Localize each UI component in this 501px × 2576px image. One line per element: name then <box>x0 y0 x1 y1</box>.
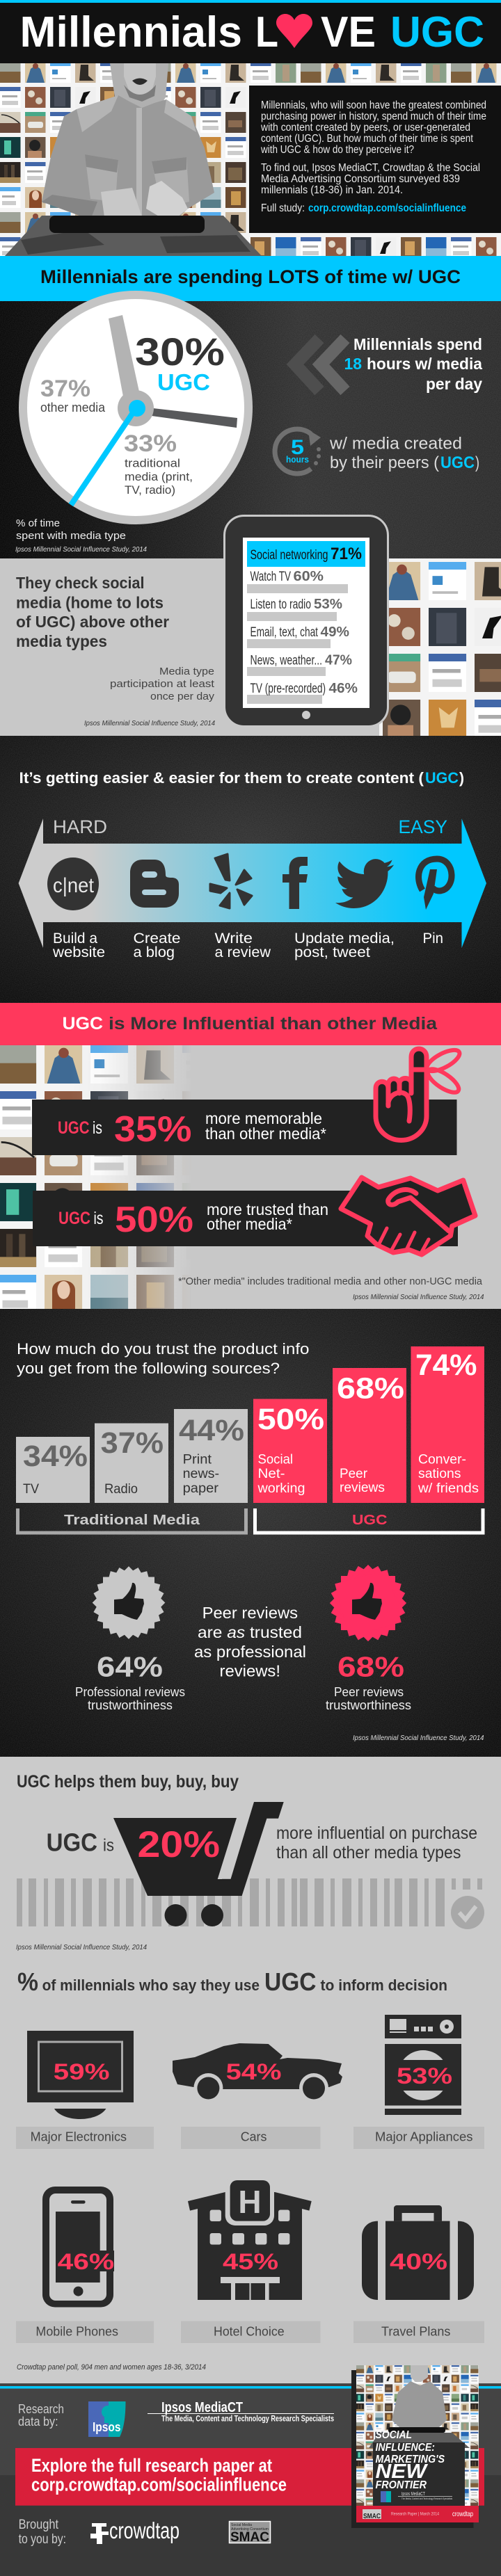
logo: crowdtap: crowdtap <box>109 2518 180 2543</box>
more influential text: more influential on purchase <box>276 1824 477 1843</box>
cover logos: Ipsos MediaCT <box>401 2492 426 2497</box>
heading: percent using UGC: of millennials who say they use <box>42 1977 260 1994</box>
source note: Ipsos Millennial Social Influence Study, 2014 <box>353 1294 484 1301</box>
heading band: more influential: is More Influential than other Media <box>109 1014 438 1033</box>
cover title: FRONTIER <box>376 2479 427 2491</box>
activity labels: Build a <box>53 931 97 947</box>
strip: 50 percent more trusted: is <box>93 1209 103 1228</box>
item: hotel choice: Hotel Choice <box>214 2325 285 2339</box>
icon: heart <box>276 14 312 48</box>
panel: trust dark background <box>0 1309 501 1757</box>
logo: SMAC <box>230 2522 270 2545</box>
brought to you by label: Brought <box>19 2518 59 2532</box>
social media heading: media types <box>16 632 107 650</box>
bracket: UGC <box>255 1508 483 1533</box>
cover logos <box>381 2491 452 2502</box>
bar: peer reviews: reviews <box>340 1481 385 1495</box>
UGC is 20 percent: 20% <box>138 1824 220 1865</box>
37 percent other media label: other media <box>40 401 106 414</box>
UGC is 20 percent: is <box>103 1836 114 1855</box>
badge: peer reviews: trustworthiness <box>326 1698 411 1712</box>
banner: explore the research paper: Explore the full research paper at <box>31 2455 272 2476</box>
intro paragraph <box>260 99 486 156</box>
bar: peer reviews: Peer <box>340 1467 368 1481</box>
chart caption <box>15 517 147 554</box>
icon: cnet <box>47 858 99 910</box>
18 hours text <box>344 335 482 393</box>
row: news: News, weather... <box>250 654 322 668</box>
hub centre <box>129 400 145 417</box>
heading band: more influential <box>0 1003 501 1045</box>
bar: conversations with friends: Conver- <box>418 1452 466 1467</box>
bar: social networking: Social <box>257 1452 293 1467</box>
row: social networking <box>247 541 365 567</box>
badge: peer reviews: 68% <box>337 1651 404 1683</box>
callout: as trusted: reviews! <box>220 1662 280 1680</box>
37 percent other media label: 37% <box>40 376 90 402</box>
badge: professional reviews: trustworthiness <box>88 1698 173 1712</box>
collage behind tablet <box>379 558 501 736</box>
logo: Ipsos MediaCT <box>148 2400 334 2424</box>
chart caption: % of time <box>16 517 60 529</box>
peers text: UGC <box>440 453 475 472</box>
research data by label: data by: <box>18 2415 58 2429</box>
row: social networking: 71% <box>331 545 362 563</box>
badge: professional reviews: 64% <box>97 1651 163 1683</box>
icon: double chevrons <box>295 339 345 391</box>
37 percent other media label <box>40 376 106 414</box>
arrow: hard to easy <box>19 816 486 948</box>
row: pre-recorded TV: 46% <box>328 681 358 696</box>
logo: Ipsos: Ipsos <box>93 2420 121 2434</box>
icon: 5 hours clock <box>275 429 321 474</box>
callout: as trusted <box>194 1604 306 1680</box>
panel: check social media grey background <box>0 558 501 736</box>
top cyan stripe <box>0 0 501 3</box>
icon: television <box>27 2031 134 2119</box>
peers text: w/ media created <box>329 434 462 453</box>
item: cars: Cars <box>241 2130 267 2143</box>
cover photo man <box>369 2365 470 2448</box>
bar: print newspaper: paper <box>183 1481 219 1496</box>
social media heading: of UGC) above other <box>16 613 169 631</box>
heading: getting easier: It’s getting easier & easier for them to create content ( <box>19 769 424 787</box>
bar: TV <box>16 1437 90 1503</box>
bar: social networking: working <box>257 1481 305 1496</box>
UGC is 20 percent <box>47 1824 220 1865</box>
bar: radio: Radio <box>104 1482 138 1497</box>
barcode <box>17 1878 482 1926</box>
source note: Ipsos Millennial Social Influence Study, 2014 <box>84 720 215 727</box>
row: radio: 53% <box>314 597 342 612</box>
chart: clock-style time split <box>23 295 248 520</box>
title text: L <box>255 8 278 56</box>
30 percent UGC label: UGC <box>157 369 210 395</box>
item: major electronics: Major Electronics <box>31 2130 127 2143</box>
icon: twitter <box>335 859 394 908</box>
activity labels: post, tweet <box>294 944 370 960</box>
item: mobile phones <box>16 2187 154 2343</box>
hand: traditional boundary dark <box>152 408 237 428</box>
activity labels: Pin <box>423 931 443 947</box>
icon: grey starburst thumbs up <box>93 1566 165 1639</box>
peers text: ) <box>475 453 479 472</box>
source note: Ipsos Millennial Social Influence Study, 2014 <box>16 1944 147 1951</box>
activity labels: website <box>52 944 105 960</box>
bracket: traditional media: Traditional Media <box>64 1513 200 1528</box>
33 percent traditional label: TV, radio) <box>125 483 175 497</box>
badge: peer reviews <box>326 1565 411 1712</box>
activity labels: Create <box>134 931 181 947</box>
heading: percent using UGC: % <box>17 1967 38 1996</box>
cover title: INFLUENCE: <box>376 2442 435 2454</box>
item: hotel choice: 45% <box>223 2249 278 2274</box>
strip: 35 percent more memorable: is <box>93 1118 102 1138</box>
item: travel plans: 40% <box>390 2249 447 2274</box>
activity labels: a blog <box>134 944 175 960</box>
bar: conversations with friends: sations <box>418 1467 461 1481</box>
panel: influence with faded collage <box>0 1045 501 1309</box>
bar: conversations with friends <box>411 1346 484 1503</box>
source note: Ipsos Millennial Social Influence Study, 2014 <box>353 1734 484 1742</box>
report cover <box>351 2365 479 2528</box>
research data by label: Research <box>18 2402 64 2416</box>
30 percent UGC label <box>135 330 225 395</box>
bar: print newspaper <box>174 1409 248 1503</box>
item: cars: 54% <box>226 2059 281 2084</box>
18 hours text: 18 <box>344 355 362 373</box>
cover red footer: Research Paper | March 2014 <box>391 2512 439 2517</box>
trust question heading <box>17 1340 309 1377</box>
bar: conversations with friends: w/ friends <box>418 1481 479 1496</box>
panel: time spent dark background <box>0 301 501 558</box>
peers text <box>329 434 479 472</box>
panel: buy section grey background <box>0 1757 501 2383</box>
intro paragraph: with UGC & how do they perceive it? <box>260 144 414 156</box>
icon: cnet: c|net <box>53 874 95 897</box>
banner: explore the research paper: corp.crowdtap.com/socialinfluence <box>31 2474 287 2495</box>
icon: suitcase <box>362 2205 474 2300</box>
item: hotel choice <box>181 2175 320 2343</box>
activity labels: Write <box>214 931 253 947</box>
cover title <box>376 2429 445 2491</box>
icon: car <box>173 2043 342 2102</box>
chart caption: spent with media type <box>16 530 126 542</box>
bar: radio <box>95 1423 168 1503</box>
cover title: SOCIAL <box>376 2429 412 2441</box>
chart caption: Ipsos Millennial Social Influence Study, 2014 <box>15 546 147 554</box>
icon: blogger <box>130 860 179 908</box>
cover red footer: crowdtap <box>452 2511 473 2518</box>
callout: as trusted: are as trusted <box>198 1623 302 1641</box>
man typing photo <box>42 63 214 224</box>
title banner <box>0 3 501 63</box>
heading: getting easier: ) <box>459 769 464 787</box>
icon: 5 hours clock: hours <box>286 454 309 465</box>
social media heading: They check social <box>16 574 145 592</box>
method paragraph: Media Advertising Consortium surveyed 839 <box>261 173 460 185</box>
more influential text: than all other media types <box>276 1843 461 1862</box>
banner: explore the research paper <box>15 2448 484 2506</box>
media type caption <box>110 666 215 702</box>
icon: hotel <box>188 2175 312 2300</box>
hand: UGC boundary grey <box>109 315 139 396</box>
callout: as trusted: Peer reviews <box>202 1604 298 1622</box>
item: mobile phones: Mobile Phones <box>35 2325 118 2339</box>
item: cars <box>173 2043 342 2149</box>
UGC is 20 percent: UGC <box>47 1828 97 1857</box>
social media heading <box>16 574 169 650</box>
cover red footer <box>356 2506 479 2522</box>
cover title: NEW <box>376 2461 429 2483</box>
33 percent traditional label: traditional <box>125 456 180 470</box>
intro paragraph: with content created by peers, or user-generated <box>260 122 470 134</box>
heading: percent using UGC: to inform decision <box>320 1977 447 1994</box>
callout: as trusted: as professional <box>194 1643 306 1661</box>
row: watch TV: 60% <box>294 569 324 584</box>
icon: phone <box>42 2187 114 2308</box>
heading: helps them buy: helps them buy, buy, buy <box>54 1772 239 1792</box>
bar: peer reviews <box>333 1368 406 1503</box>
row: watch TV <box>247 569 348 593</box>
bar: social networking: 50% <box>257 1403 324 1436</box>
heading: getting easier: UGC <box>425 769 459 787</box>
table weathering <box>21 230 250 255</box>
bar: radio: 37% <box>101 1426 164 1460</box>
logo: Ipsos MediaCT: Ipsos MediaCT <box>161 2400 243 2415</box>
strip: 50 percent more trusted: 50% <box>115 1200 193 1240</box>
bracket: UGC: UGC <box>352 1513 387 1528</box>
badge: professional reviews <box>75 1566 185 1712</box>
cover red footer: SMAC <box>363 2513 381 2520</box>
icon: finger with bow <box>376 1046 463 1140</box>
method paragraph: millennials (18-36) in Jan. 2014. <box>261 184 403 196</box>
bar: social networking: Net- <box>257 1467 285 1481</box>
33 percent traditional label: media (print, <box>125 470 193 483</box>
bar: print newspaper: 44% <box>179 1414 244 1447</box>
bar: peer reviews: 68% <box>337 1372 404 1406</box>
item: major electronics: 59% <box>54 2059 110 2084</box>
row: social networking: Social networking <box>250 548 328 563</box>
full study link <box>261 202 466 214</box>
icon: washing machine <box>385 2015 461 2115</box>
social media heading: media (home to lots <box>16 594 164 612</box>
cover logos: The Media, Content and Technology Research Specialists <box>401 2497 452 2500</box>
bar: TV: TV <box>23 1482 39 1497</box>
item: major appliances: 53% <box>397 2063 452 2088</box>
trust question heading: you get from the following sources? <box>17 1360 280 1377</box>
row: watch TV: Watch TV <box>250 570 291 584</box>
footnote: *"Other media" includes traditional media and other non-UGC media <box>178 1275 483 1287</box>
photo collage background <box>0 63 501 256</box>
row: email: Email, text, chat <box>250 625 319 640</box>
strip: 50 percent more trusted <box>33 1191 458 1246</box>
panel: introduction <box>249 86 501 233</box>
icon: 5 hours clock: 5 <box>291 436 304 459</box>
33 percent traditional label: 33% <box>124 430 177 457</box>
heading band: spending time <box>0 256 501 301</box>
keyboard <box>49 216 205 233</box>
hub <box>118 390 154 426</box>
row: radio: Listen to radio <box>250 597 311 612</box>
strip: 35 percent more memorable: UGC <box>58 1118 89 1138</box>
source note: Crowdtap panel poll, 904 men and women ages 18-36, 3/2014 <box>17 2363 206 2372</box>
icon: pinterest <box>419 859 452 910</box>
full study link: corp.crowdtap.com/socialinfluence <box>308 202 466 214</box>
row: pre-recorded TV <box>247 681 358 704</box>
method paragraph: To find out, Ipsos MediaCT, Crowdtap & the Social <box>261 162 480 174</box>
bar: social networking <box>253 1399 327 1503</box>
strip: 50 percent more trusted: UGC <box>58 1209 90 1228</box>
bar: print newspaper: Print <box>183 1452 212 1467</box>
strip: 35 percent more memorable: more memorable <box>205 1109 322 1127</box>
item: travel plans <box>353 2205 484 2343</box>
item: mobile phones: 46% <box>58 2249 114 2274</box>
row: radio <box>247 597 342 621</box>
media type caption: once per day <box>150 691 215 702</box>
activity labels <box>52 931 443 960</box>
item: major appliances <box>353 2015 484 2149</box>
logo: SMAC: SMAC <box>230 2530 269 2545</box>
heading: percent using UGC <box>17 1967 447 1996</box>
hand: cyan <box>71 408 136 505</box>
logo: crowdtap <box>90 2518 180 2544</box>
icon: facebook <box>283 857 308 909</box>
cover title: MARKETING'S <box>376 2454 445 2465</box>
bar: TV: 34% <box>23 1440 88 1473</box>
bar: print newspaper: news- <box>183 1467 219 1481</box>
bracket: traditional media <box>18 1508 246 1533</box>
title text: Millennials <box>19 8 242 56</box>
panel: footer background <box>0 2383 501 2576</box>
row: news: 47% <box>325 652 352 668</box>
title text: UGC <box>390 8 484 56</box>
icon: red starburst thumbs up <box>330 1565 406 1641</box>
heading: percent using UGC: UGC <box>264 1967 316 1996</box>
heading band: spending time: Millennials are spending LOTS of time w/ UGC <box>40 266 461 287</box>
bar: conversations with friends: 74% <box>415 1349 477 1382</box>
icon: hotel: H <box>238 2184 262 2220</box>
trust question heading: How much do you trust the product info <box>17 1340 309 1358</box>
heading band: more influential: UGC <box>63 1014 103 1033</box>
brought to you by label <box>19 2518 66 2547</box>
method paragraph <box>261 162 480 196</box>
heading: helps them buy: UGC <box>17 1772 50 1792</box>
media type caption: Media type <box>159 666 214 677</box>
tablet chart <box>224 516 388 726</box>
icon: handshake <box>341 1177 475 1255</box>
18 hours text: per day <box>426 375 482 393</box>
row: email: 49% <box>320 625 349 640</box>
more influential text <box>276 1824 477 1862</box>
18 hours text: hours w/ media <box>367 355 482 373</box>
33 percent traditional label <box>124 430 193 497</box>
row: email <box>247 625 349 648</box>
logo: Ipsos MediaCT: The Media, Content and Technology Research Specialists <box>161 2414 334 2424</box>
item: travel plans: Travel Plans <box>381 2325 450 2339</box>
row: news <box>247 652 352 676</box>
panel: ease of creation dark background <box>0 736 501 1003</box>
full study link: Full study: <box>261 202 305 214</box>
icon: shopping cart <box>113 1802 284 1926</box>
strip: 35 percent more memorable: than other media* <box>205 1125 326 1143</box>
30 percent UGC label: 30% <box>135 330 225 373</box>
activity labels: a review <box>214 944 271 960</box>
bar chart: trust by source <box>16 1346 484 1503</box>
peers text: by their peers ( <box>330 453 439 472</box>
icon: yelp <box>210 854 252 908</box>
research data by label <box>18 2402 64 2429</box>
easy label: EASY <box>398 816 447 837</box>
logo: SMAC: Social Media <box>231 2523 253 2527</box>
row: pre-recorded TV: TV (pre-recorded) <box>250 682 326 696</box>
badge: peer reviews: Peer reviews <box>334 1685 404 1699</box>
18 hours text: Millennials spend <box>353 335 482 353</box>
strip: 35 percent more memorable <box>32 1100 456 1155</box>
logo: Ipsos <box>88 2401 125 2437</box>
item: major appliances: Major Appliances <box>375 2130 473 2143</box>
strip: 50 percent more trusted: other media* <box>207 1215 292 1233</box>
wooden table <box>5 216 262 256</box>
strip: 35 percent more memorable: 35% <box>114 1109 192 1150</box>
activity labels: Update media, <box>294 931 395 947</box>
strip: 50 percent more trusted: more trusted than <box>207 1200 328 1218</box>
intro paragraph: content (UGC). But how much of their time is spent <box>261 133 474 145</box>
icon: barcode check badge <box>451 1896 484 1929</box>
logo: SMAC: Advertising Consortium <box>231 2527 269 2531</box>
title text: VE <box>321 8 376 56</box>
badge: professional reviews: Professional reviews <box>75 1685 185 1699</box>
item: major electronics <box>16 2031 154 2149</box>
media type caption: participation at least <box>110 678 215 690</box>
title text <box>19 8 484 56</box>
hard label: HARD <box>53 816 107 837</box>
brought to you by label: to you by: <box>19 2532 66 2547</box>
